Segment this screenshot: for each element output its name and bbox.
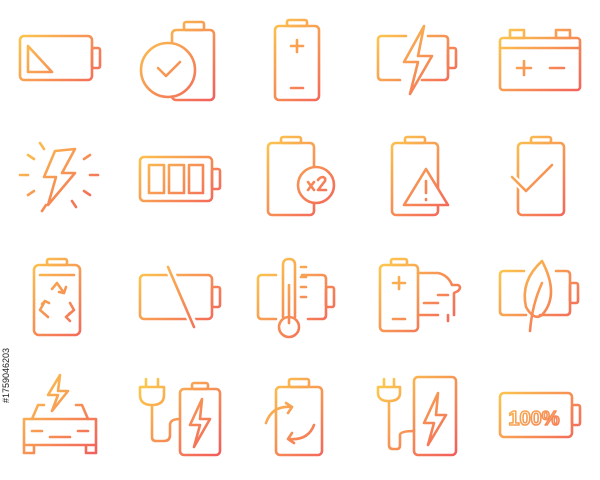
- icon: battery with lightning: [378, 26, 456, 94]
- icon: leaf battery: [500, 261, 578, 331]
- icon: battery warning: [392, 137, 448, 215]
- icon: lightning with rays: [20, 143, 98, 211]
- icon: refresh battery: [266, 379, 322, 455]
- icon: plug power bank: [378, 377, 456, 455]
- icon: battery check: [512, 137, 564, 215]
- icon: plug battery: [140, 379, 220, 455]
- icon: thermometer battery: [258, 259, 334, 337]
- icon: battery 100%: [500, 393, 580, 437]
- icon: recycle battery: [34, 259, 80, 335]
- icon: low battery: [20, 36, 100, 80]
- icon: full battery cells: [140, 157, 220, 201]
- icon: battery car: [380, 259, 460, 331]
- stock id text: #1759046203: [1, 347, 11, 403]
- icon: electric car: [24, 375, 96, 453]
- icon: battery with clock: [141, 22, 214, 100]
- icon: vertical battery plus minus: [275, 20, 319, 100]
- icon: battery 100%: 100%: [508, 408, 560, 430]
- icon: battery x2: [268, 137, 334, 215]
- icon: empty battery slash: [140, 261, 220, 331]
- icon: car battery: [500, 30, 580, 90]
